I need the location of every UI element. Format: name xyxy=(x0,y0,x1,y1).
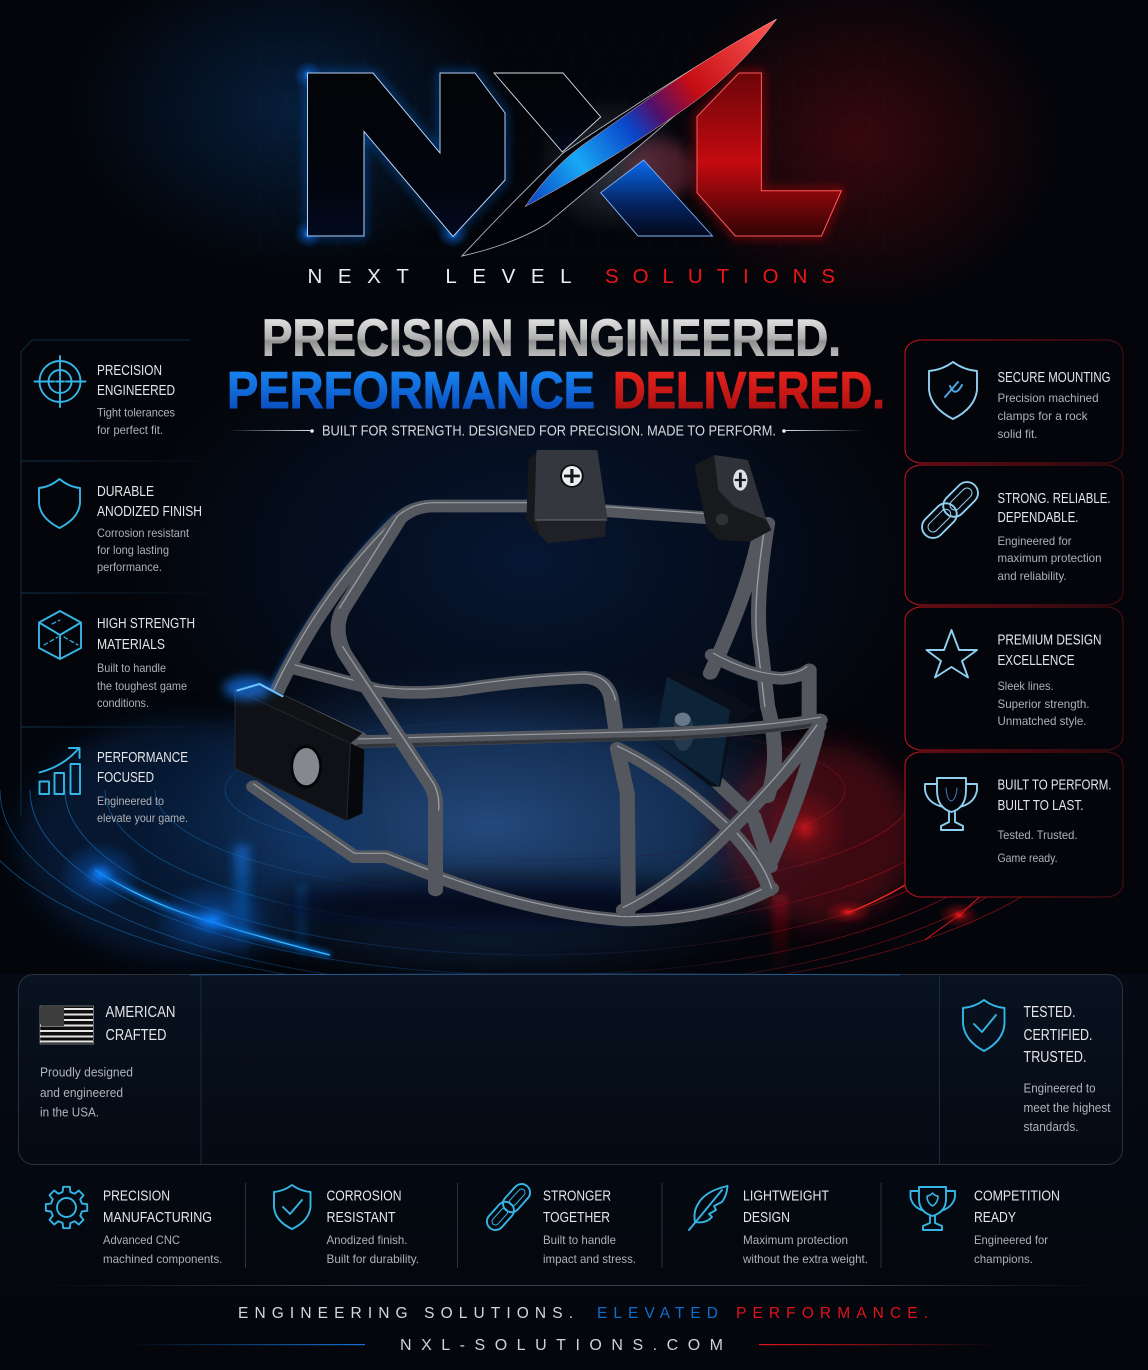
icon: chain link xyxy=(917,477,983,543)
lower area backdrop xyxy=(0,974,1148,1370)
feature: performance focused xyxy=(40,748,188,825)
text: standards. xyxy=(1024,1119,1078,1134)
text: CERTIFIED. xyxy=(1024,1027,1092,1044)
text: impact and stress. xyxy=(543,1252,636,1266)
tubes xyxy=(254,503,820,920)
text: meet the highest xyxy=(1024,1100,1111,1115)
headline: DELIVERED. xyxy=(613,362,885,420)
text xyxy=(97,750,188,825)
back tubes xyxy=(710,523,817,867)
text: Game ready. xyxy=(998,851,1058,865)
text: ENGINEERED xyxy=(97,383,175,399)
logo tagline xyxy=(308,265,835,288)
text: Tested. Trusted. xyxy=(998,828,1078,842)
logo letter N xyxy=(308,73,505,236)
text xyxy=(998,632,1102,728)
text: and reliability. xyxy=(998,569,1066,583)
icon: cube xyxy=(39,611,81,659)
text: clamps for a rock xyxy=(998,409,1088,423)
left side clamp with button xyxy=(224,677,364,821)
logo xyxy=(294,19,841,256)
logo glow xyxy=(294,61,841,248)
headline: PRECISION ENGINEERED. xyxy=(262,310,841,368)
panel: secure mounting xyxy=(905,340,1123,463)
text: Engineered to xyxy=(97,794,164,808)
text: Engineered to xyxy=(1024,1080,1096,1096)
panel: strong reliable dependable xyxy=(905,465,1123,605)
lower info panel xyxy=(18,974,1122,1164)
text xyxy=(97,484,202,574)
icon: chain link xyxy=(483,1181,534,1233)
card xyxy=(905,340,1123,463)
text: BUILT TO LAST. xyxy=(998,798,1084,814)
text: CORROSION xyxy=(326,1188,402,1204)
text: PERFORMANCE xyxy=(97,750,188,766)
text: AMERICAN xyxy=(106,1004,176,1021)
text: READY xyxy=(974,1210,1016,1226)
text: maximum protection xyxy=(998,551,1102,565)
text: PREMIUM DESIGN xyxy=(998,632,1102,648)
text: Built for durability. xyxy=(326,1252,419,1266)
text xyxy=(974,1188,1060,1266)
text xyxy=(998,778,1112,865)
text: Precision machined xyxy=(998,391,1098,405)
text: Sleek lines. xyxy=(998,679,1054,693)
text: PRECISION xyxy=(97,363,162,379)
text xyxy=(543,1188,636,1266)
text: DEPENDABLE. xyxy=(998,510,1078,526)
text: for perfect fit. xyxy=(97,423,163,437)
icon: shield with wrench xyxy=(929,362,977,419)
benefit: stronger together xyxy=(483,1181,636,1266)
text: FOCUSED xyxy=(97,770,154,786)
logo swoosh xyxy=(462,19,776,256)
text: SECURE MOUNTING xyxy=(998,370,1110,386)
text: EXCELLENCE xyxy=(998,653,1075,669)
footer tagline: ELEVATED xyxy=(597,1305,718,1322)
text: MATERIALS xyxy=(97,637,165,653)
icon: trophy xyxy=(910,1187,955,1230)
text: machined components. xyxy=(103,1252,222,1266)
icon: trophy xyxy=(925,778,977,830)
text: Maximum protection xyxy=(743,1233,848,1247)
text: for long lasting xyxy=(97,543,169,557)
text xyxy=(1024,1004,1111,1134)
icon: rising bar chart xyxy=(40,748,80,794)
icon: star xyxy=(926,630,977,678)
panel: built to perform xyxy=(905,752,1123,897)
logo letter X xyxy=(494,73,712,236)
floor with glowing rings xyxy=(0,660,1105,995)
text: Superior strength. xyxy=(998,697,1090,711)
facemask product illustration xyxy=(224,452,820,920)
icon: gear xyxy=(46,1187,87,1228)
text xyxy=(103,1188,222,1266)
text: Proudly designed xyxy=(40,1064,133,1080)
text xyxy=(998,491,1110,583)
text: MANUFACTURING xyxy=(103,1210,212,1226)
text: DURABLE xyxy=(97,484,154,500)
text: Engineered for xyxy=(998,534,1072,548)
icon: shield xyxy=(39,479,80,528)
feature: durable anodized finish xyxy=(39,479,202,574)
text: BUILT TO PERFORM. xyxy=(998,778,1112,794)
text: RESISTANT xyxy=(326,1210,396,1226)
footer divider xyxy=(35,1285,1110,1286)
card xyxy=(905,607,1123,750)
footer tagline: ENGINEERING SOLUTIONS. xyxy=(238,1305,573,1322)
logo letter L xyxy=(697,73,841,236)
text: without the extra weight. xyxy=(742,1252,868,1266)
top right clamp with screw xyxy=(694,455,772,542)
logo tagline: SOLUTIONS xyxy=(605,265,835,288)
panel: premium design excellence xyxy=(905,607,1123,750)
text: the toughest game xyxy=(97,679,187,693)
text: STRONG. RELIABLE. xyxy=(998,491,1110,507)
text: Advanced CNC xyxy=(103,1233,180,1247)
card xyxy=(905,752,1123,897)
icon: shield check xyxy=(963,1000,1004,1051)
text: Engineered for xyxy=(974,1233,1048,1247)
text: ANODIZED FINISH xyxy=(97,504,202,520)
text: in the USA. xyxy=(40,1104,99,1120)
icon: feather xyxy=(689,1186,728,1230)
footer tagline xyxy=(238,1305,928,1322)
headline: PERFORMANCE xyxy=(227,362,595,420)
text: STRONGER xyxy=(543,1188,611,1204)
text: champions. xyxy=(974,1252,1033,1266)
card: tested certified trusted xyxy=(963,1000,1111,1134)
logo tagline: NEXT LEVEL xyxy=(308,265,572,288)
text: Built to handle xyxy=(543,1233,616,1247)
feature: precision engineered xyxy=(34,356,175,437)
text: TRUSTED. xyxy=(1024,1049,1086,1066)
feature: high strength materials xyxy=(39,611,195,710)
headline xyxy=(227,310,885,420)
icon: shield check xyxy=(274,1185,310,1229)
right side clamp xyxy=(655,670,758,787)
text: Unmatched style. xyxy=(998,714,1086,728)
text xyxy=(998,370,1110,441)
left panel: feature list frame xyxy=(21,340,231,816)
benefit: lightweight design xyxy=(689,1186,868,1266)
text xyxy=(97,616,195,710)
subheading: BUILT FOR STRENGTH. DESIGNED FOR PRECISION. MADE TO PERFORM. xyxy=(322,424,776,440)
text: solid fit. xyxy=(998,427,1038,441)
bottom strip dividers xyxy=(245,1183,882,1268)
text: DESIGN xyxy=(743,1210,790,1226)
rim light glow xyxy=(267,515,398,697)
text: COMPETITION xyxy=(974,1188,1060,1204)
footer tagline: PERFORMANCE. xyxy=(736,1305,928,1322)
text: HIGH STRENGTH xyxy=(97,616,195,632)
text xyxy=(326,1188,419,1266)
text: elevate your game. xyxy=(97,811,188,825)
top center clamp with screw xyxy=(526,452,606,543)
icon: american flag xyxy=(40,1006,94,1044)
benefit: corrosion resistant xyxy=(274,1185,419,1266)
card: american crafted xyxy=(40,1004,176,1120)
benefit: precision manufacturing xyxy=(46,1187,222,1266)
text: and engineered xyxy=(40,1085,123,1100)
text xyxy=(40,1004,176,1120)
text: performance. xyxy=(97,560,162,574)
benefit: competition ready xyxy=(910,1187,1060,1266)
text: CRAFTED xyxy=(106,1027,166,1044)
card xyxy=(905,465,1123,605)
icon: crosshair target xyxy=(34,356,86,407)
text: Corrosion resistant xyxy=(97,526,190,540)
text: TESTED. xyxy=(1024,1004,1076,1021)
text xyxy=(97,363,175,437)
text: Tight tolerances xyxy=(97,406,175,420)
text: TOGETHER xyxy=(543,1210,610,1226)
text: conditions. xyxy=(97,696,149,710)
text: PRECISION xyxy=(103,1188,170,1204)
text: Built to handle xyxy=(97,661,166,675)
footer website: NXL-SOLUTIONS.COM xyxy=(400,1337,723,1354)
text xyxy=(742,1188,868,1266)
text: LIGHTWEIGHT xyxy=(743,1188,829,1204)
text: Anodized finish. xyxy=(326,1233,408,1247)
